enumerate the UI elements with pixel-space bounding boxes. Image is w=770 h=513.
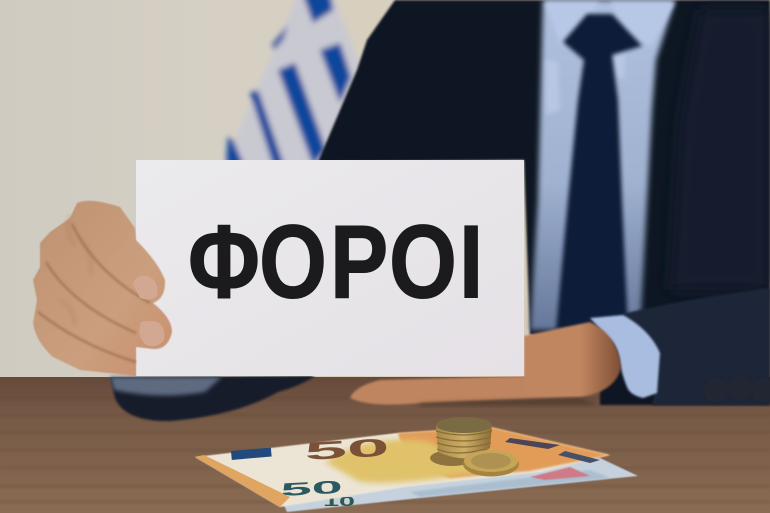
sign card [136,160,524,376]
banknote value bottom: 50 [280,477,343,500]
right hand on table [350,322,621,406]
left shirt cuff [110,377,222,396]
back banknote [283,448,638,512]
greek flag [224,0,360,165]
necktie [556,14,642,330]
sleeve buttons [704,376,770,402]
suit jacket [318,0,770,405]
euro banknotes and coins [195,417,638,512]
left sleeve under sign [110,376,315,421]
jacket forearm and sleeve [622,288,770,405]
table top [0,377,770,513]
sign heading text: ΦΟΡΟΙ [188,204,483,320]
banknote value top: 50 [304,434,390,466]
shirt [530,0,675,330]
note details [231,448,272,460]
left hand holding sign [33,201,172,376]
single coin [463,450,519,476]
shirt folds [546,45,626,115]
shirt cuff [590,315,660,398]
fingernails [133,276,158,300]
orange banknote [195,427,610,507]
wall background [0,0,770,380]
shirt collar [545,2,675,48]
coin stack [430,417,492,466]
small note value: 10 [323,493,355,509]
